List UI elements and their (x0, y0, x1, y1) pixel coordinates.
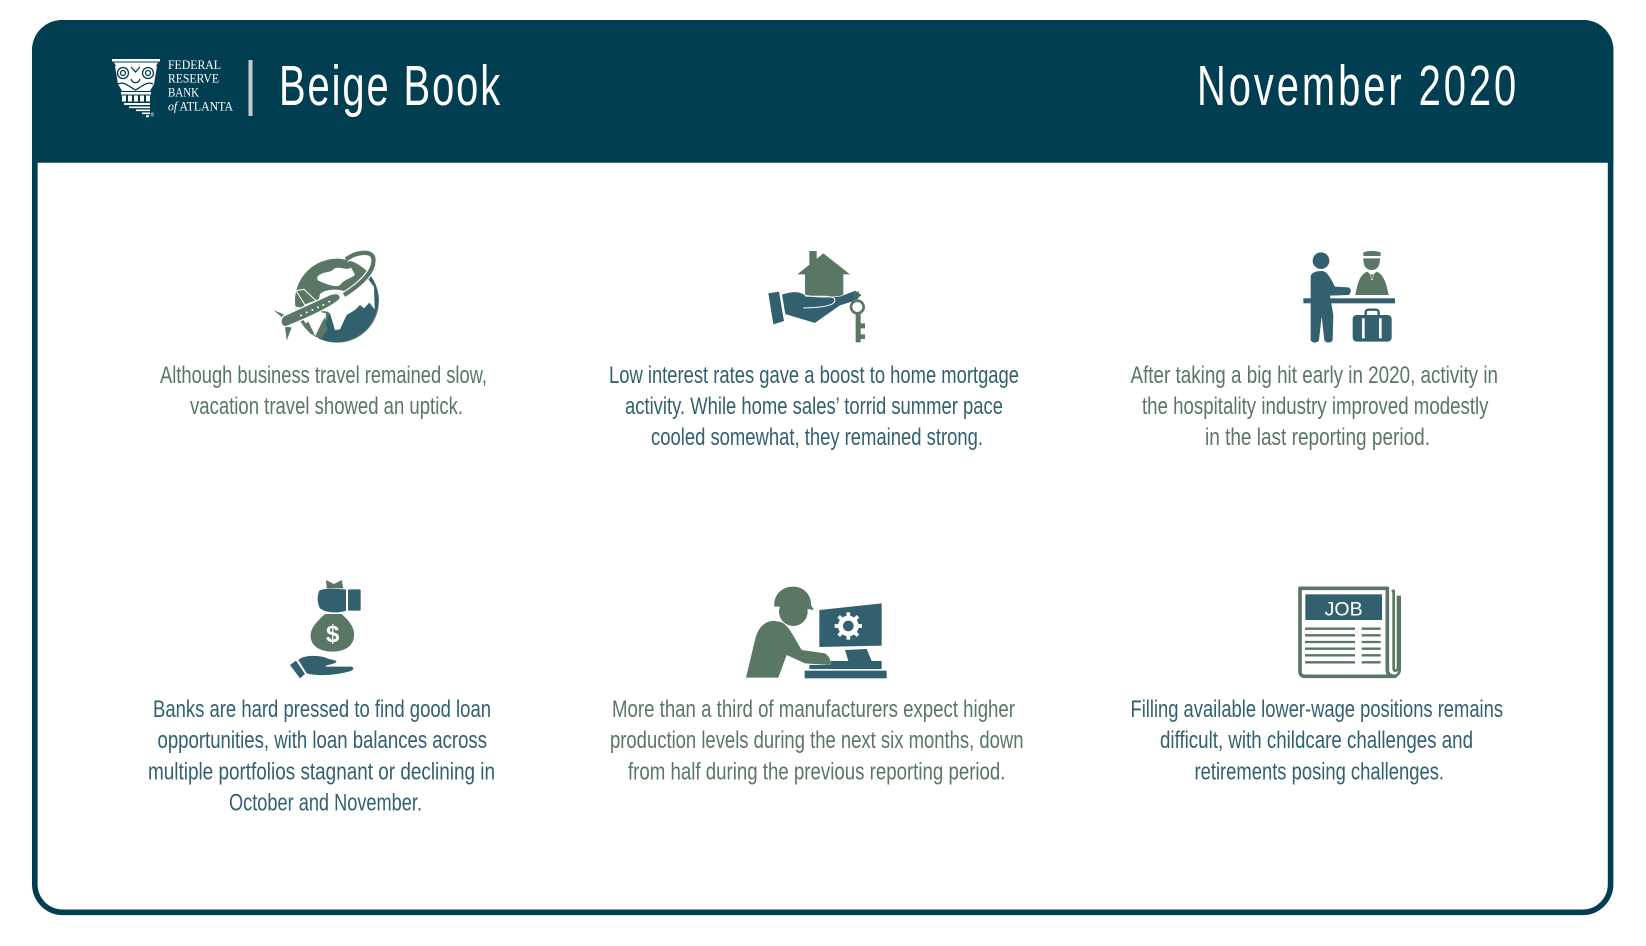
date: November 2020: November 2020 (1197, 54, 1516, 118)
logo wordmark: BANK (168, 84, 200, 100)
icon: hotel reception (1303, 251, 1395, 342)
panel: manufacturing (610, 587, 1024, 785)
logo emblem: ® (150, 112, 154, 118)
text: banking (148, 696, 495, 817)
text: housing: Low interest rates gave a boost to home mortgage (609, 362, 1019, 389)
header (32, 20, 1613, 163)
text: banking: Banks are hard pressed to find good loan (153, 696, 491, 723)
text: housing: activity. While home sales’ torrid summer pace (625, 393, 1003, 420)
text: hospitality: After taking a big hit early in 2020, activity in (1130, 362, 1498, 389)
panel: hospitality (1130, 251, 1498, 451)
icon: house, hand and key (768, 251, 865, 342)
text: manufacturing: from half during the previous reporting period. (628, 758, 1006, 785)
panel: labor (1130, 588, 1503, 785)
icon: job newspaper: JOB (1325, 600, 1363, 621)
logo wordmark: RESERVE (168, 70, 219, 86)
text: banking: October and November. (229, 790, 422, 817)
text: housing (609, 362, 1019, 451)
icon: money bag and hands (290, 580, 361, 678)
icon: money bag and hands: $ (326, 621, 339, 648)
title: Beige Book: Beige Book (279, 54, 501, 118)
text: manufacturing (610, 696, 1024, 785)
text: travel (160, 362, 487, 420)
text: hospitality (1130, 362, 1498, 451)
text: labor: difficult, with childcare challenges and (1160, 727, 1473, 754)
text: travel: Although business travel remained slow, (160, 362, 487, 389)
icon: job newspaper (1300, 588, 1400, 676)
panel: banking (148, 580, 495, 817)
text: labor (1130, 696, 1503, 785)
logo wordmark (168, 57, 234, 114)
text: labor: retirements posing challenges. (1194, 758, 1444, 785)
logo wordmark: of ATLANTA (168, 98, 234, 114)
logo: Federal Reserve Bank of Atlanta (112, 57, 234, 118)
icon: worker at computer (746, 587, 887, 678)
header divider (248, 60, 252, 116)
panel: housing (609, 251, 1019, 451)
text: travel: vacation travel showed an uptick. (190, 393, 463, 420)
icon: globe and airplane (273, 253, 379, 343)
text: manufacturing: production levels during the next six months, down (610, 727, 1024, 754)
logo wordmark: FEDERAL (168, 57, 221, 72)
text: banking: opportunities, with loan balances across (158, 727, 487, 754)
text: housing: cooled somewhat, they remained strong. (651, 424, 983, 451)
text: hospitality: the hospitality industry improved modestly (1142, 393, 1488, 420)
text: hospitality: in the last reporting period. (1205, 424, 1430, 451)
text: banking: multiple portfolios stagnant or declining in (148, 758, 495, 785)
text: manufacturing: More than a third of manufacturers expect higher (612, 696, 1015, 723)
panel: travel (160, 253, 487, 420)
text: labor: Filling available lower-wage positions remains (1130, 696, 1503, 723)
